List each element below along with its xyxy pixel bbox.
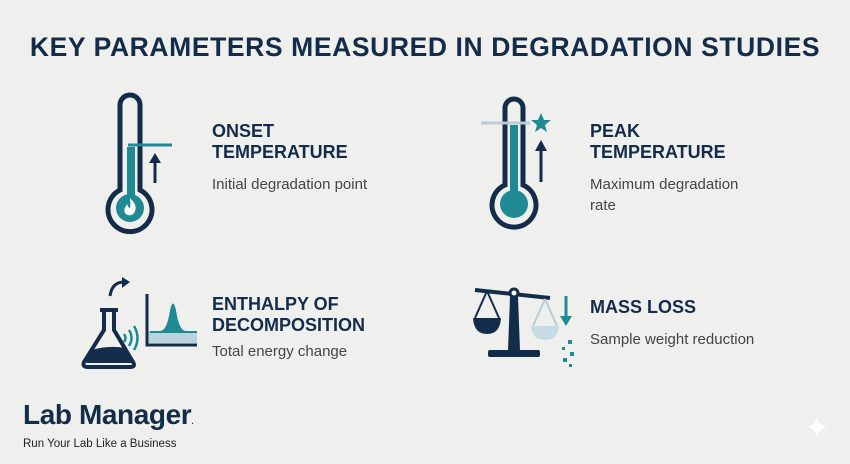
- logo: [23, 399, 194, 450]
- text: mass loss: MASS LOSS: [590, 297, 696, 317]
- text: onset: ONSET: [212, 121, 274, 141]
- text: onset: TEMPERATURE: [212, 142, 348, 162]
- icon: enthalpy flask and curve: [82, 277, 197, 369]
- text: peak: Maximum degradation: [590, 176, 738, 193]
- text: enthalpy: [212, 294, 365, 360]
- text: enthalpy: ENTHALPY OF: [212, 294, 339, 314]
- title: KEY PARAMETERS MEASURED IN DEGRADATION STUDIES: [30, 32, 820, 62]
- icon: sparkle: [808, 418, 826, 436]
- logo: Run Your Lab Like a Business: [23, 438, 176, 450]
- logo: Lab Manager.: [23, 399, 193, 430]
- text: enthalpy: Total energy change: [212, 343, 347, 360]
- text: peak: [590, 121, 738, 214]
- text: onset: [212, 121, 368, 193]
- text: mass loss: Sample weight reduction: [590, 331, 754, 348]
- text: peak: PEAK: [590, 121, 640, 141]
- text: onset: Initial degradation point: [212, 176, 367, 193]
- icon: onset thermometer: [106, 92, 172, 234]
- icon: scale mass loss: [473, 288, 574, 367]
- text: peak: rate: [590, 197, 616, 214]
- icon: peak thermometer: [481, 96, 551, 230]
- text: peak: TEMPERATURE: [590, 142, 726, 162]
- text: mass loss: [590, 297, 754, 348]
- text: enthalpy: DECOMPOSITION: [212, 315, 365, 335]
